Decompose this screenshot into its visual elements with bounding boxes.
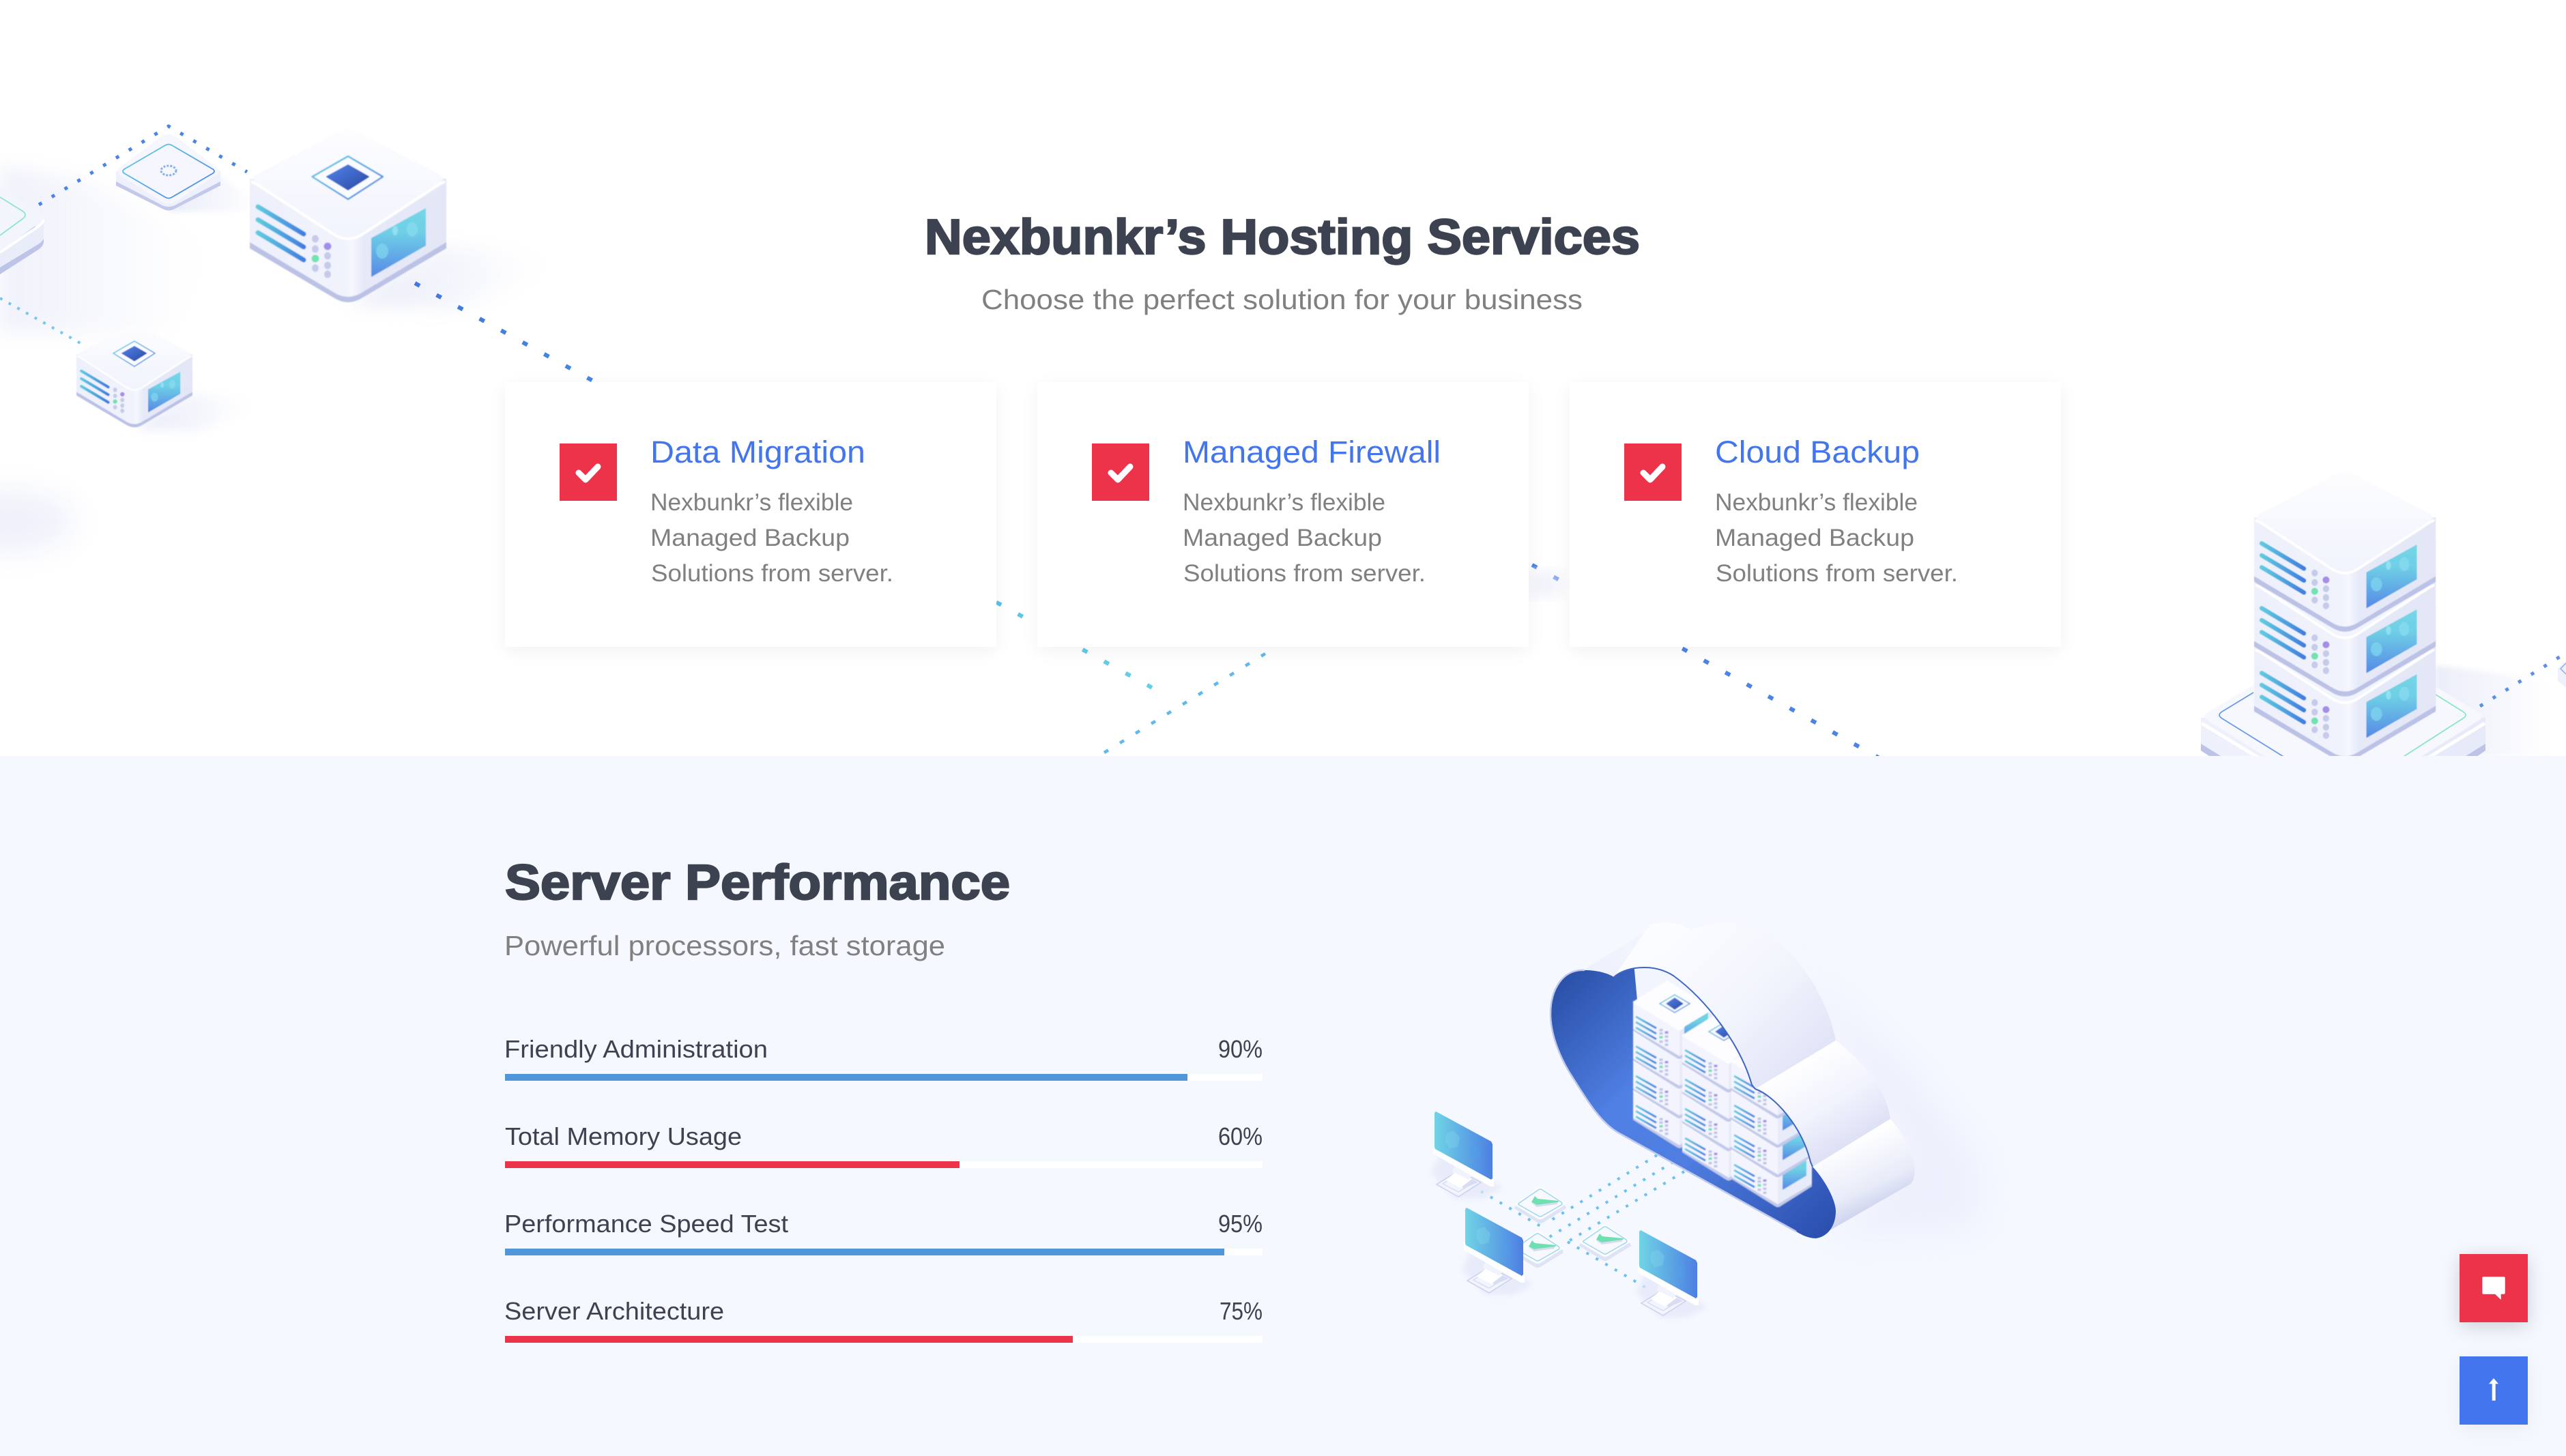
card text: Nexbunkr’s flexible bbox=[1715, 489, 1918, 516]
small server cube bbox=[76, 340, 192, 428]
icon: check badge bbox=[560, 443, 617, 501]
card text: Solutions from server. bbox=[651, 560, 893, 587]
cloud opening bbox=[1551, 967, 1836, 1238]
racks inside cloud bbox=[1633, 955, 1836, 1208]
tile with check A bbox=[1514, 1187, 1566, 1223]
card heading: Managed Firewall bbox=[1183, 435, 1441, 469]
shadow: big cube bbox=[363, 252, 476, 308]
cloud opening outline bbox=[1551, 967, 1813, 1232]
bar: Server Architecture 75%: Server Architecture bbox=[504, 1297, 724, 1325]
tile with check C bbox=[1579, 1224, 1631, 1261]
card text: Managed Backup bbox=[650, 525, 850, 551]
monitor 2 bbox=[1462, 1208, 1533, 1295]
icon: check badge bbox=[1092, 443, 1149, 501]
service card 3: Cloud Backup bbox=[1570, 382, 2061, 651]
server module: middle bbox=[2254, 537, 2436, 697]
card text bbox=[1183, 489, 1426, 587]
shadow: right stack bbox=[2436, 665, 2506, 755]
bar: Friendly Administration 90%: 90% bbox=[1218, 1035, 1263, 1063]
shadow: small cube bbox=[143, 398, 209, 431]
bar: Total Memory Usage 60% bbox=[505, 1122, 1263, 1168]
server stack with base platform bbox=[2201, 517, 2485, 756]
rack column 2 bbox=[1682, 1014, 1763, 1180]
dotted line: to small cube bbox=[0, 298, 85, 346]
card text: Managed Backup bbox=[1715, 525, 1914, 551]
button: chat bbox=[2460, 1254, 2528, 1326]
rack column 3 bbox=[1731, 1040, 1812, 1208]
rack column 1 bbox=[1633, 980, 1714, 1148]
dotted line: right connector bbox=[2480, 653, 2566, 706]
dotted line: central connector bbox=[1532, 565, 1890, 764]
illustration: cloud servers and monitors bbox=[1431, 922, 1979, 1317]
partial platform at left edge bbox=[0, 187, 44, 274]
monitor 1 bbox=[1431, 1111, 1503, 1199]
title: Nexbunkr’s Hosting Services bbox=[925, 210, 1640, 265]
bar: Performance Speed Test 95%: 95% bbox=[1218, 1210, 1263, 1238]
card surface bbox=[1570, 382, 2061, 651]
illustration: left server network bbox=[0, 126, 2566, 832]
subheading: Powerful processors, fast storage bbox=[504, 930, 945, 961]
subtitle: Choose the perfect solution for your business bbox=[981, 284, 1583, 315]
card surface bbox=[505, 382, 996, 651]
card text: Solutions from server. bbox=[1716, 560, 1958, 587]
back wall bbox=[1633, 955, 1836, 1119]
dotted line: crossing line bbox=[1099, 654, 1265, 756]
shadow: cloud bbox=[1802, 976, 1979, 1238]
base platform bbox=[2201, 635, 2485, 832]
service card 1: Data Migration bbox=[505, 382, 996, 651]
icon: up arrow bbox=[2489, 1378, 2498, 1401]
card text bbox=[1715, 489, 1958, 587]
card heading: Cloud Backup bbox=[1715, 435, 1920, 469]
icon: check badge bbox=[1624, 443, 1682, 501]
bar: Total Memory Usage 60%: Total Memory Usage bbox=[505, 1122, 742, 1150]
bar: Performance Speed Test 95% bbox=[504, 1210, 1263, 1255]
card heading: Data Migration bbox=[650, 435, 865, 469]
dotted line: top connector bbox=[39, 126, 247, 205]
tile with check B bbox=[1512, 1231, 1563, 1268]
icon: speech bubble bbox=[2482, 1277, 2505, 1300]
tiny chip platform bbox=[116, 134, 227, 212]
card text: Nexbunkr’s flexible bbox=[650, 489, 853, 516]
big server cube bbox=[249, 154, 447, 303]
bar: Server Architecture 75%: 75% bbox=[1220, 1297, 1263, 1325]
monitor 3 bbox=[1636, 1230, 1707, 1317]
button: back to top bbox=[2460, 1356, 2528, 1429]
shadow: hidden node behind cards bbox=[1525, 573, 1563, 595]
partial platform at right edge bbox=[2558, 660, 2566, 688]
shadow: left platform wash bbox=[1, 171, 90, 330]
bar: Friendly Administration 90% bbox=[504, 1035, 1263, 1081]
server module: bottom bbox=[2254, 602, 2436, 761]
top section background bbox=[0, 0, 2566, 756]
bar: Total Memory Usage 60%: 60% bbox=[1218, 1122, 1263, 1150]
heading: Server Performance: Server Performance bbox=[505, 856, 1010, 910]
card text: Nexbunkr’s flexible bbox=[1183, 489, 1385, 516]
dotted line: big cube to firewall bbox=[415, 283, 1168, 697]
bottom section background bbox=[0, 756, 2566, 1456]
card surface bbox=[1037, 382, 1529, 651]
service card 2: Managed Firewall bbox=[1037, 382, 1529, 651]
server module: top bbox=[2254, 472, 2436, 632]
dotted connectors bbox=[1481, 1155, 1684, 1291]
bar: Server Architecture 75% bbox=[504, 1297, 1263, 1343]
shadow: lower left smudge bbox=[0, 493, 66, 550]
bar: Friendly Administration 90%: Friendly Administration bbox=[504, 1035, 768, 1063]
card text bbox=[650, 489, 893, 587]
card text: Managed Backup bbox=[1183, 525, 1382, 551]
bar: Performance Speed Test 95%: Performance Speed Test bbox=[504, 1210, 788, 1238]
card text: Solutions from server. bbox=[1183, 560, 1426, 587]
cloud body bbox=[1583, 922, 1914, 1238]
